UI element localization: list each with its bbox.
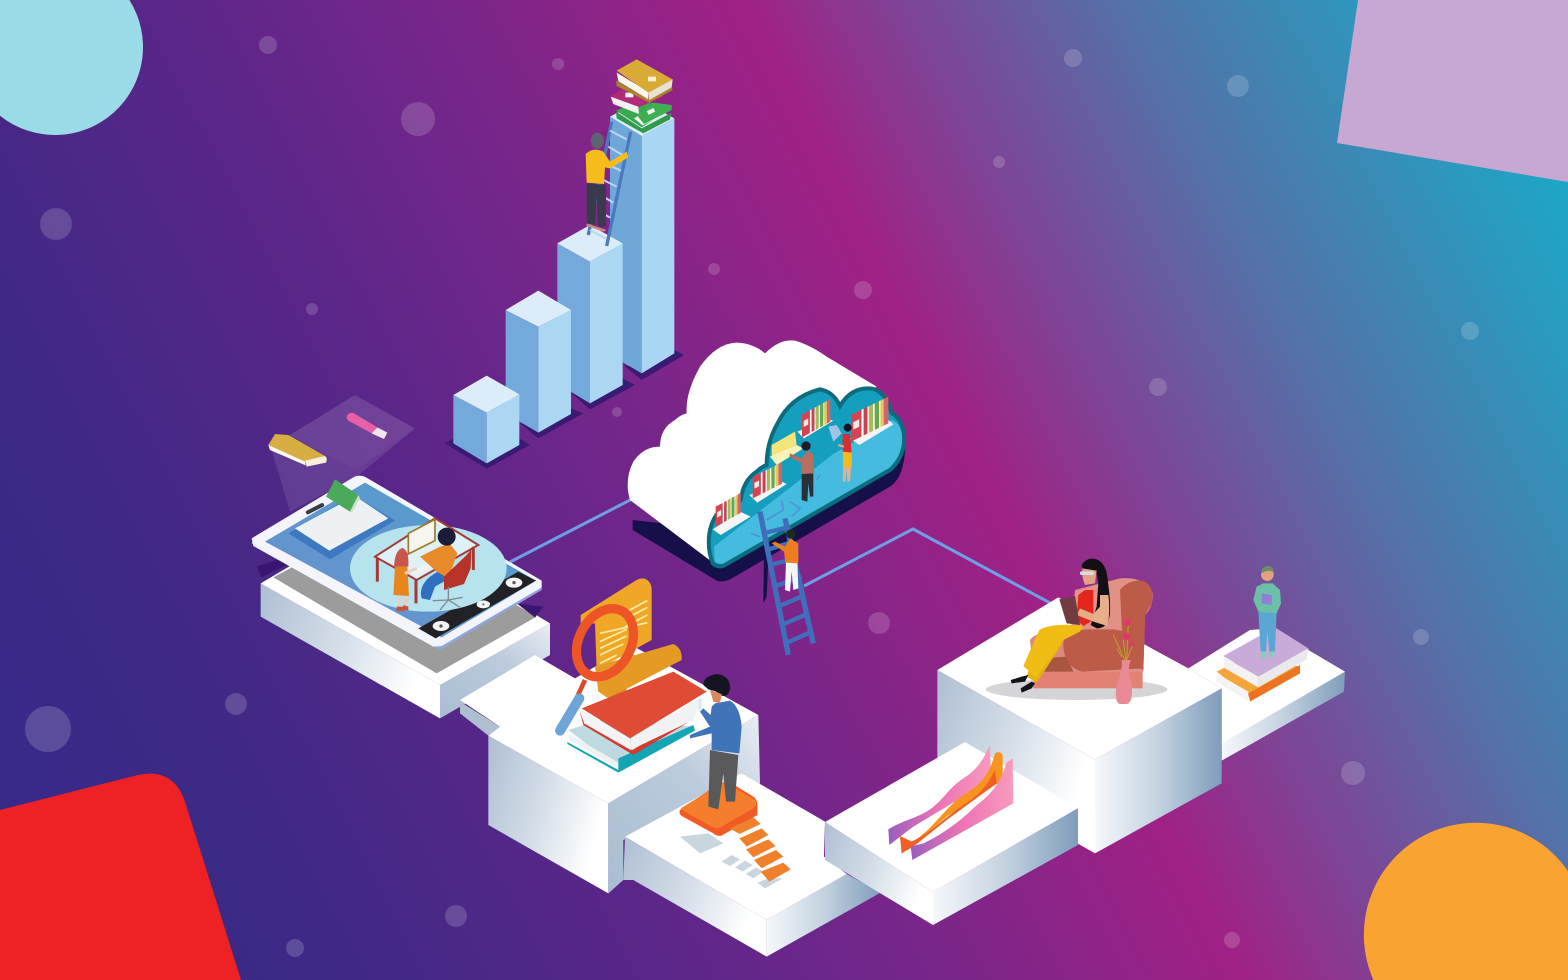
wave chart [888, 745, 1013, 860]
figure [1253, 566, 1281, 658]
pink eraser [347, 413, 387, 439]
woman in cloud [838, 424, 852, 482]
shelf books [713, 397, 893, 535]
platform: document block [460, 645, 760, 893]
digital glyphs [751, 475, 820, 537]
ladder shadow [763, 543, 768, 603]
bar chart with climber and books [445, 59, 684, 469]
man in cloud [789, 441, 814, 502]
platform: stairs block [623, 773, 881, 957]
man at desk [420, 528, 471, 610]
front ribbon [911, 758, 1013, 860]
cloud shadow [633, 443, 905, 581]
reading woman in armchair [986, 559, 1167, 704]
tablet [288, 495, 395, 559]
climber [586, 133, 628, 232]
aisle floor [714, 420, 902, 564]
magnifier [560, 599, 645, 731]
green book [326, 479, 360, 513]
bar shadows [445, 350, 684, 469]
app buttons [433, 578, 522, 631]
bar 4 [610, 100, 674, 373]
platform: armchair block left face [937, 670, 1095, 853]
girl at desk [393, 548, 417, 611]
flower vase [1113, 619, 1134, 704]
scroll [581, 578, 682, 698]
cloud face [709, 388, 904, 566]
connector lines [510, 499, 1052, 604]
standing man [679, 674, 757, 836]
cloud climber [772, 529, 798, 592]
middle ribbon [900, 752, 1003, 853]
platform: phone base [257, 517, 550, 718]
desk [375, 518, 478, 603]
cloud library [628, 340, 905, 655]
green book [616, 100, 672, 133]
book stack [1216, 627, 1308, 702]
speaker [305, 502, 325, 515]
orange stairs [680, 817, 791, 888]
middle ribbon shade [900, 770, 997, 853]
bar 1 [453, 376, 519, 463]
teal book [567, 717, 695, 773]
platform: right small block [1188, 628, 1345, 761]
projection beam [271, 395, 415, 512]
standing woman on books [1216, 566, 1308, 702]
phone body [252, 476, 542, 650]
magenta book [611, 87, 664, 114]
bar 2 [506, 291, 571, 433]
woman [1011, 559, 1110, 693]
yellow book [268, 434, 327, 467]
books, scroll and magnifier [560, 578, 791, 888]
red book [579, 672, 707, 755]
platform: chart block [825, 742, 1078, 925]
yellow book [616, 59, 673, 103]
ladder [588, 122, 631, 246]
teal spotlight [350, 525, 507, 612]
bar 3 [557, 225, 623, 403]
armchair [1030, 578, 1153, 688]
folders [770, 432, 803, 465]
floor shadow [986, 679, 1167, 700]
platform: armchair block [937, 597, 1222, 853]
cloud white body [628, 340, 877, 568]
hologram screen [828, 425, 842, 442]
ladder [760, 512, 813, 655]
phone [252, 395, 542, 650]
back ribbon [888, 745, 991, 845]
